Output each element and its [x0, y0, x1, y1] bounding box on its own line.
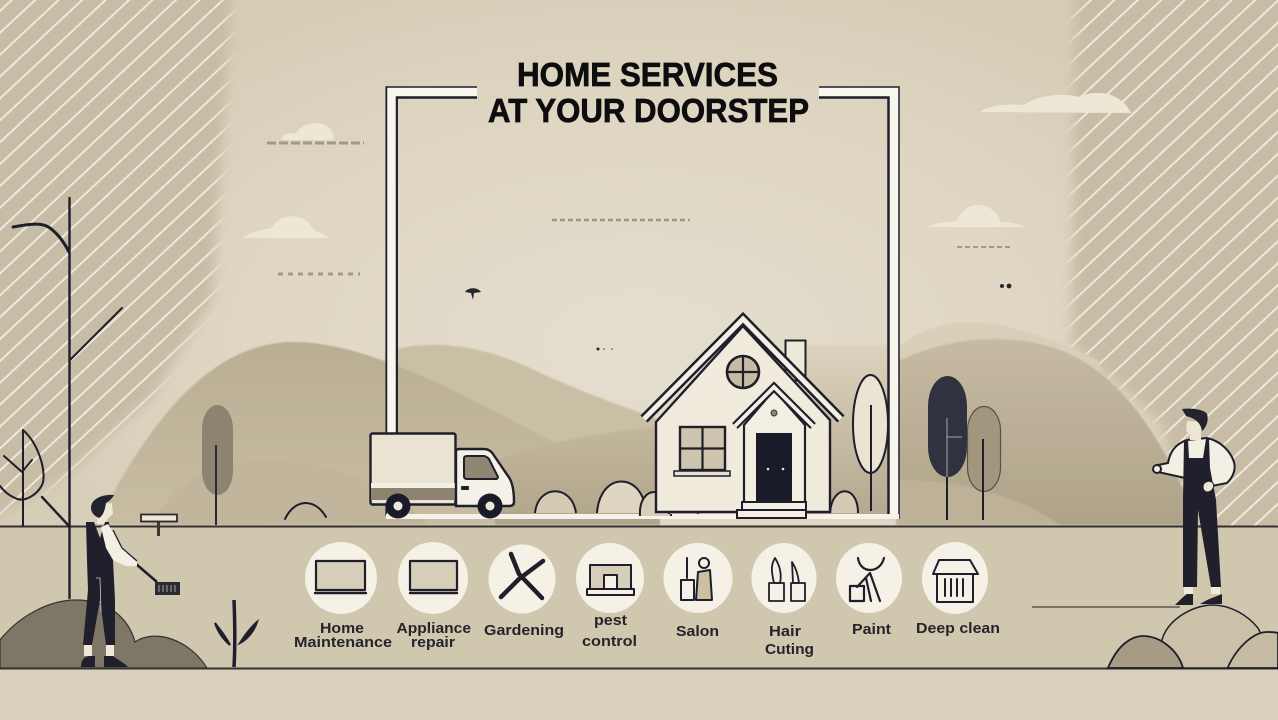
label [582, 613, 637, 650]
label [765, 624, 814, 658]
background hatching: left [0, 0, 234, 515]
dots [596, 284, 1011, 350]
label: Gardening [484, 623, 564, 639]
house body [656, 326, 830, 512]
label [396, 621, 471, 651]
label: Cuting [765, 642, 814, 658]
small bush left [285, 503, 326, 519]
taupe tree [968, 406, 1000, 520]
label: Hair [769, 624, 801, 640]
porch [744, 390, 805, 512]
label: Home [320, 621, 364, 637]
title [488, 56, 809, 129]
service: salon [664, 543, 732, 640]
label: Maintenance [294, 635, 392, 651]
round window [727, 356, 759, 388]
left lamp post [13, 198, 122, 598]
icon: shopfront [933, 560, 978, 602]
label: Deep clean [916, 621, 1000, 637]
title: AT YOUR DOORSTEP [488, 92, 809, 129]
service: appliance repair [396, 542, 471, 651]
left leaf plant [0, 430, 44, 526]
service: pest control [576, 543, 644, 650]
worker standing [1153, 409, 1235, 605]
delivery truck [370, 434, 514, 518]
icon: bottle and figure [681, 558, 712, 600]
white frame [386, 92, 899, 519]
label [294, 621, 392, 651]
label: Appliance [396, 621, 471, 637]
head [1186, 421, 1201, 440]
right mounds [1108, 605, 1278, 668]
icon: crossed tools [501, 554, 543, 598]
head [97, 503, 113, 524]
broom [136, 564, 157, 582]
arms and torso [1158, 438, 1235, 487]
overalls [83, 522, 115, 645]
label: control [582, 634, 637, 650]
label: Paint [852, 622, 891, 638]
background hatching: right [1050, 0, 1278, 527]
cloud specks [267, 143, 1012, 274]
ground band [0, 527, 1278, 669]
icon: pest device [587, 565, 634, 595]
label: repair [411, 635, 455, 651]
service: hair cutting [752, 543, 816, 658]
icon: screen [410, 561, 457, 593]
left mounds [0, 600, 207, 668]
clouds [243, 93, 1131, 238]
bottom band [0, 669, 1278, 720]
small plant [215, 600, 257, 667]
service: gardening [484, 544, 564, 639]
icon highlights [503, 584, 540, 596]
icon: pliers and can [850, 558, 884, 601]
ground lines [0, 526, 1278, 668]
worker with broom [81, 495, 180, 667]
main roof [644, 319, 841, 419]
front door [756, 433, 792, 503]
shirt arm [101, 524, 137, 566]
icon: bottles [769, 558, 805, 601]
title: HOME SERVICES [517, 56, 778, 93]
service: paint [836, 543, 902, 638]
label: Salon [676, 624, 719, 640]
bushes [535, 481, 858, 516]
left grey tree [202, 405, 233, 525]
overalls [1183, 439, 1221, 587]
roller sign [141, 514, 177, 536]
service: deep clean [916, 542, 1000, 637]
window [674, 427, 730, 476]
outlined tree [853, 375, 888, 511]
steps [737, 502, 806, 518]
service: home maintenance [294, 542, 392, 651]
house [644, 319, 841, 518]
icon: small bird [465, 288, 481, 300]
label: pest [594, 613, 627, 629]
hills [96, 322, 1198, 525]
icon: screen [315, 561, 366, 593]
dark tree [928, 376, 967, 520]
chimney [786, 340, 806, 380]
